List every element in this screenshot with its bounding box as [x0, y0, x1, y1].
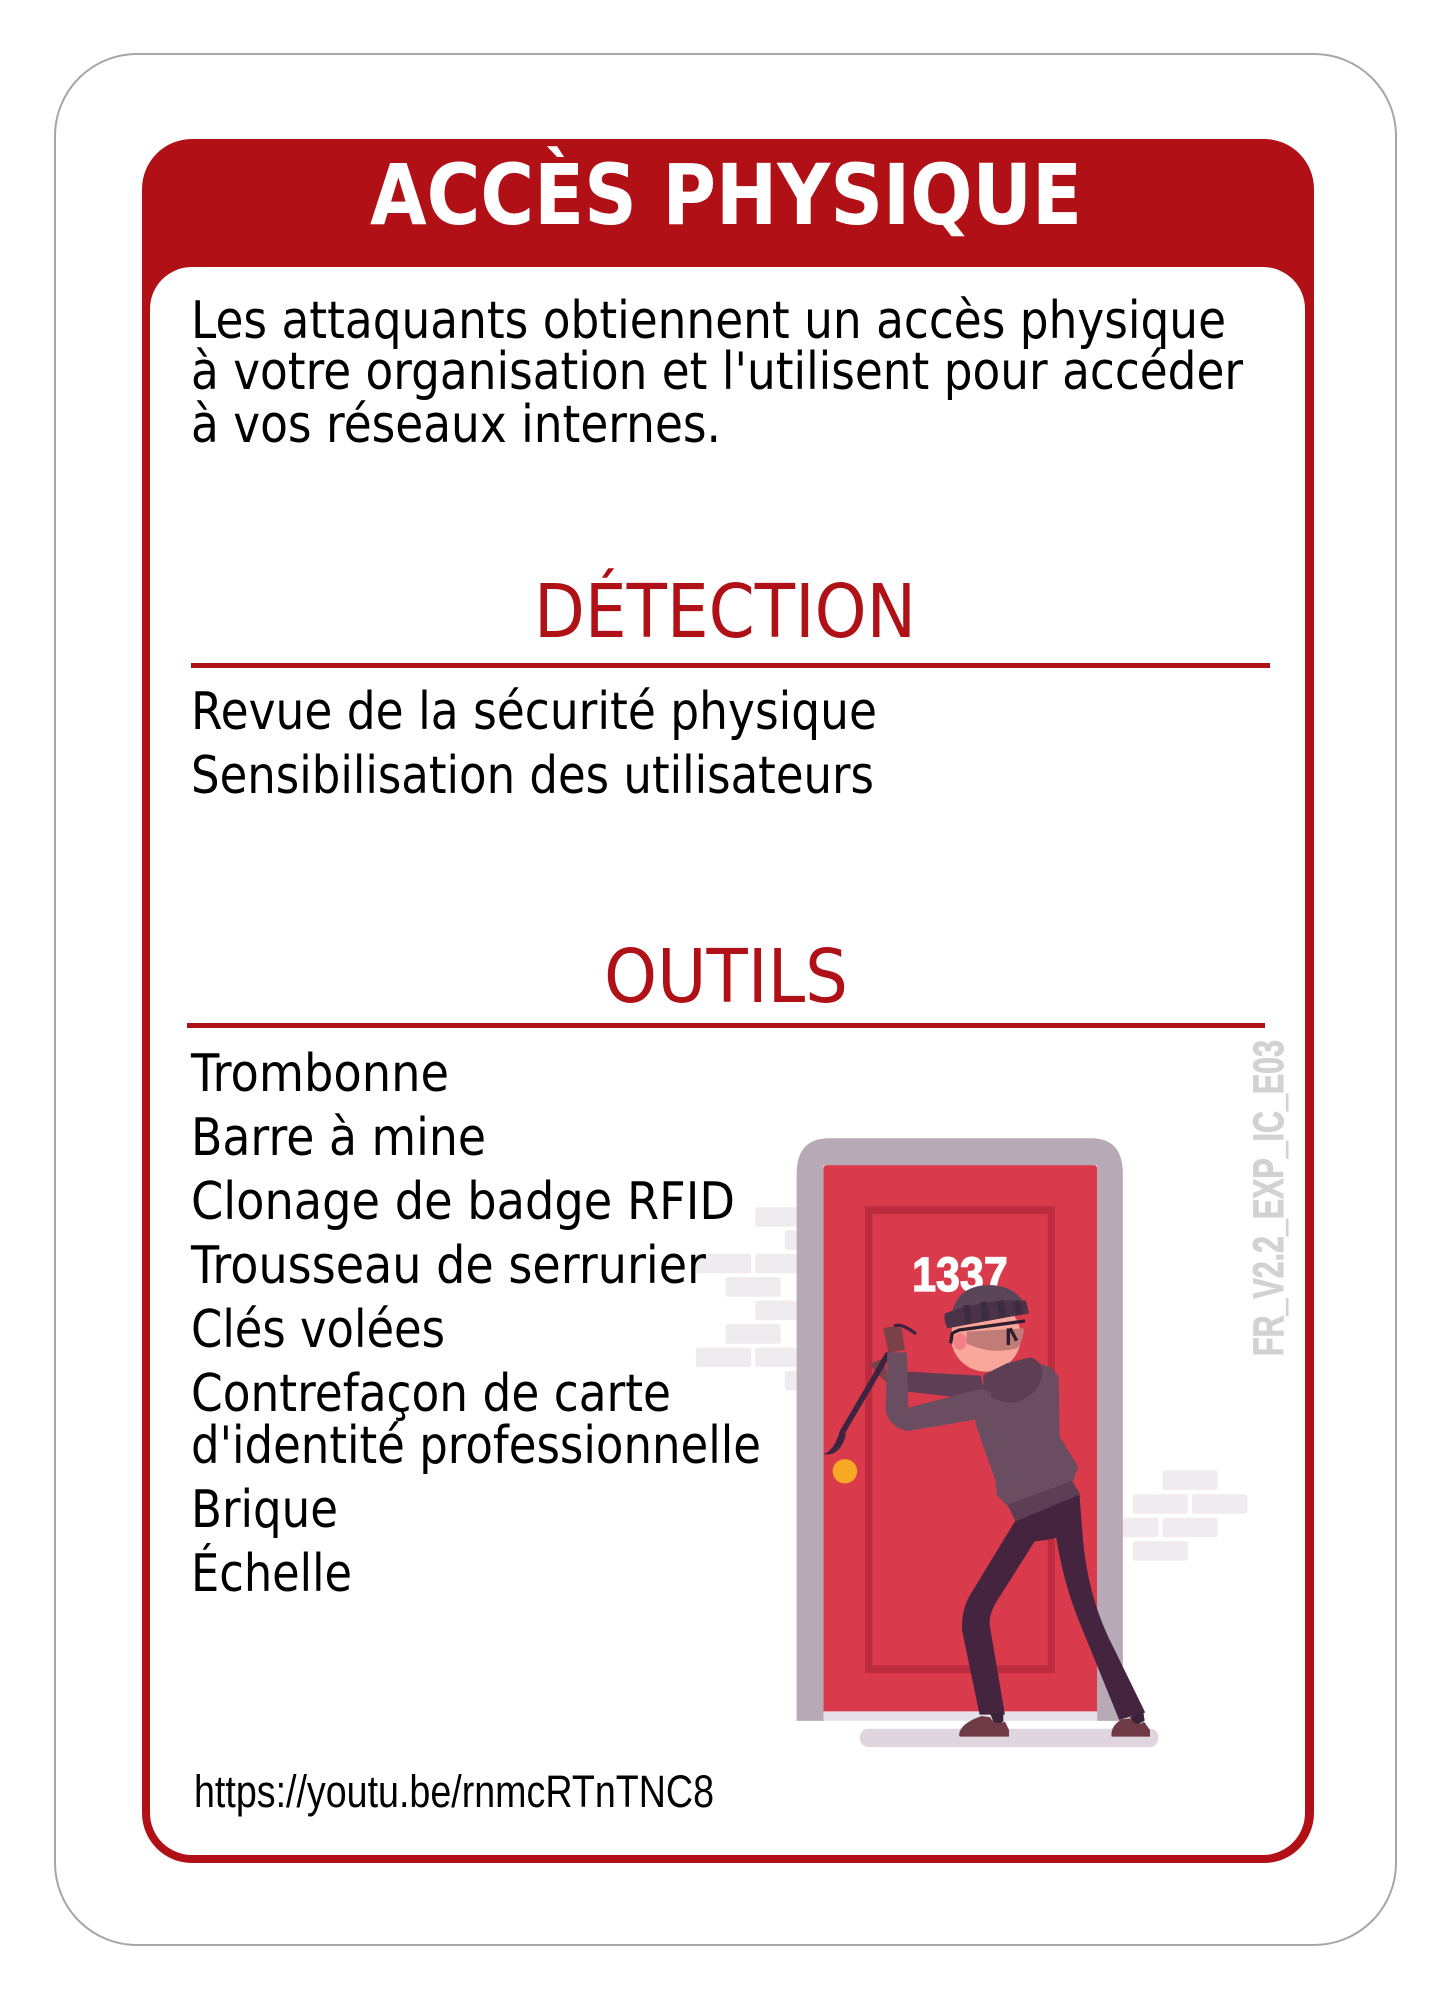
version code: FR_V2.2_EXP_IC_E03: [1245, 1040, 1293, 1356]
door number: 1337: [912, 1247, 1008, 1302]
description text: à votre organisation et l'utilisent pour accéder: [191, 342, 1244, 402]
tools list: Brique: [191, 1480, 338, 1540]
door scene: [696, 1138, 1247, 1747]
tools list: d'identité professionnelle: [191, 1416, 761, 1476]
crowbar: [843, 1353, 888, 1432]
detection list: Sensibilisation des utilisateurs: [191, 746, 874, 806]
sweater hem: [1008, 1482, 1079, 1521]
description text: Les attaquants obtiennent un accès physique: [191, 291, 1226, 351]
floor shadow: [860, 1729, 1158, 1747]
detection list: Revue de la sécurité physique: [191, 682, 877, 742]
front arm: [887, 1353, 990, 1430]
tools list: Trombonne: [190, 1044, 449, 1104]
detection list: [191, 682, 877, 806]
description text: à vos réseaux internes.: [191, 395, 721, 455]
heading: outils: OUTILS: [604, 934, 848, 1020]
door: [824, 1165, 1097, 1711]
sweater body: [977, 1363, 1077, 1505]
title: ACCÈS PHYSIQUE: [370, 146, 1082, 244]
door frame: [797, 1138, 1123, 1721]
door knob: [833, 1459, 857, 1483]
tools list: Barre à mine: [191, 1108, 486, 1168]
hood: [983, 1357, 1043, 1403]
front glove: [883, 1327, 905, 1353]
panel: red frame and white content area: [142, 139, 1314, 1863]
bricks left of the door: [696, 1207, 799, 1390]
tools list: Clonage de badge RFID: [191, 1172, 735, 1232]
threshold: [824, 1711, 1097, 1721]
tools list: [190, 1044, 761, 1604]
shoes: [990, 1713, 1003, 1726]
back arm: [907, 1373, 983, 1397]
burglar legs: [959, 1497, 1150, 1737]
mask over the eyes: [967, 1328, 1024, 1351]
tools list: Clés volées: [191, 1300, 445, 1360]
heading: détection: DÉTECTION: [534, 567, 916, 655]
illustration: burglar at the door: [696, 1138, 1247, 1747]
video link: https://youtu.be/rnmcRTnTNC8: [194, 1766, 714, 1817]
tools list: Trousseau de serrurier: [190, 1236, 707, 1296]
tools list: Échelle: [191, 1543, 352, 1604]
door panel: [869, 1210, 1051, 1669]
beanie: [953, 1285, 1026, 1317]
burglar upper body: [823, 1285, 1079, 1521]
tools list: Contrefaçon de carte: [191, 1364, 671, 1424]
description text: [191, 291, 1244, 455]
bricks right of the door: [1121, 1470, 1247, 1561]
head: [951, 1302, 1021, 1372]
back glove: [869, 1359, 888, 1384]
